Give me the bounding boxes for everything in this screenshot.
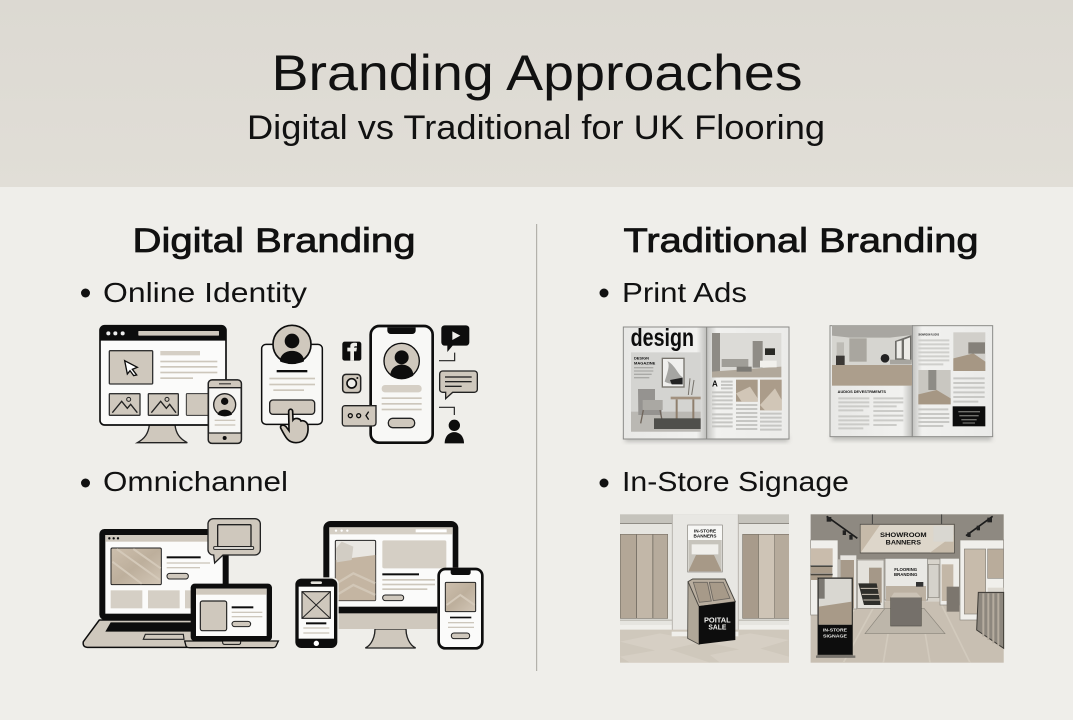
- back wall and counter: [840, 555, 945, 634]
- icon: facebook: [342, 342, 361, 361]
- track lights: [827, 516, 993, 540]
- icon: desktop monitor: [323, 521, 458, 648]
- illustration: omnichannel devices: [83, 519, 484, 650]
- magazine: design spread: [623, 325, 789, 442]
- hanging banner: SHOWROOM: [880, 532, 927, 539]
- icon: video bubble: [439, 325, 469, 361]
- icon: person: [439, 407, 464, 443]
- left wood display: [811, 540, 838, 615]
- header band: [0, 0, 1073, 187]
- icon: social profile on phone: [371, 326, 433, 443]
- wood panels left: [620, 534, 668, 619]
- illustration: print ad magazines: [623, 325, 993, 442]
- right wood displays: [928, 540, 1004, 648]
- bullet: Omnichannel: Omnichannel: [103, 466, 288, 497]
- roll-up banner: [816, 578, 855, 657]
- icon: phone overlapping desktop: [208, 380, 241, 443]
- point-of-sale stand: SALE: [708, 623, 726, 632]
- wall poster: [688, 525, 722, 572]
- magazine: design spread: DESIGN: [634, 357, 649, 361]
- illustration: in-store signage scenes: [620, 514, 1004, 663]
- back wall and counter: BRANDING: [894, 572, 918, 577]
- icon: desktop website: [100, 326, 226, 443]
- illustration: online identity icons: [100, 325, 477, 443]
- scene: point-of-sale display: [620, 514, 789, 663]
- divider between columns: [536, 224, 537, 671]
- heading: Digital Branding: Digital Branding: [132, 222, 416, 260]
- wood panels right: [742, 534, 789, 619]
- icon: message bubble: [440, 371, 477, 399]
- roll-up banner: IN-STORE: [823, 628, 847, 633]
- scene: showroom: [811, 514, 1004, 663]
- roll-up banner: SIGNAGE: [823, 634, 847, 639]
- icon: speech bubble with laptop: [208, 519, 260, 563]
- wall poster: IN-STORE: [694, 529, 716, 534]
- magazine: showroom spread: SHOWROOM FLOORS: [918, 333, 939, 337]
- point-of-sale stand: [688, 579, 735, 644]
- bullet: Online Identity: Online Identity: [103, 277, 307, 308]
- icon: phone with wireframe: [294, 577, 339, 649]
- icon: instagram: [343, 374, 361, 393]
- icon: chat chip: [342, 406, 376, 426]
- icon: small laptop: [185, 584, 278, 648]
- point-of-sale stand: POITAL: [704, 615, 731, 624]
- back wall and counter: FLOORING: [894, 567, 918, 572]
- heading: Traditional Branding: Traditional Branding: [624, 222, 978, 260]
- magazine: design spread: MAGAZINE: [634, 361, 656, 365]
- hanging banner: BANNERS: [886, 540, 922, 547]
- bullet: In-Store Signage: In-Store Signage: [622, 466, 849, 497]
- wall poster: BANNERS: [693, 534, 717, 539]
- title: Branding Approaches: [272, 45, 802, 101]
- subtitle: Digital vs Traditional for UK Flooring: [247, 109, 825, 147]
- icon: profile card with tap: [262, 325, 322, 443]
- icon: laptop: [83, 529, 229, 647]
- magazine: showroom spread: AUDIOS DEVESTRMEMTS: [838, 389, 886, 394]
- magazine: design spread: A: [712, 380, 718, 389]
- bullet: Print Ads: Print Ads: [622, 277, 747, 308]
- magazine masthead: design: [631, 325, 694, 352]
- magazine: showroom spread: [830, 326, 993, 440]
- icon: phone with wood image: [437, 568, 484, 650]
- hanging banner: [860, 514, 954, 553]
